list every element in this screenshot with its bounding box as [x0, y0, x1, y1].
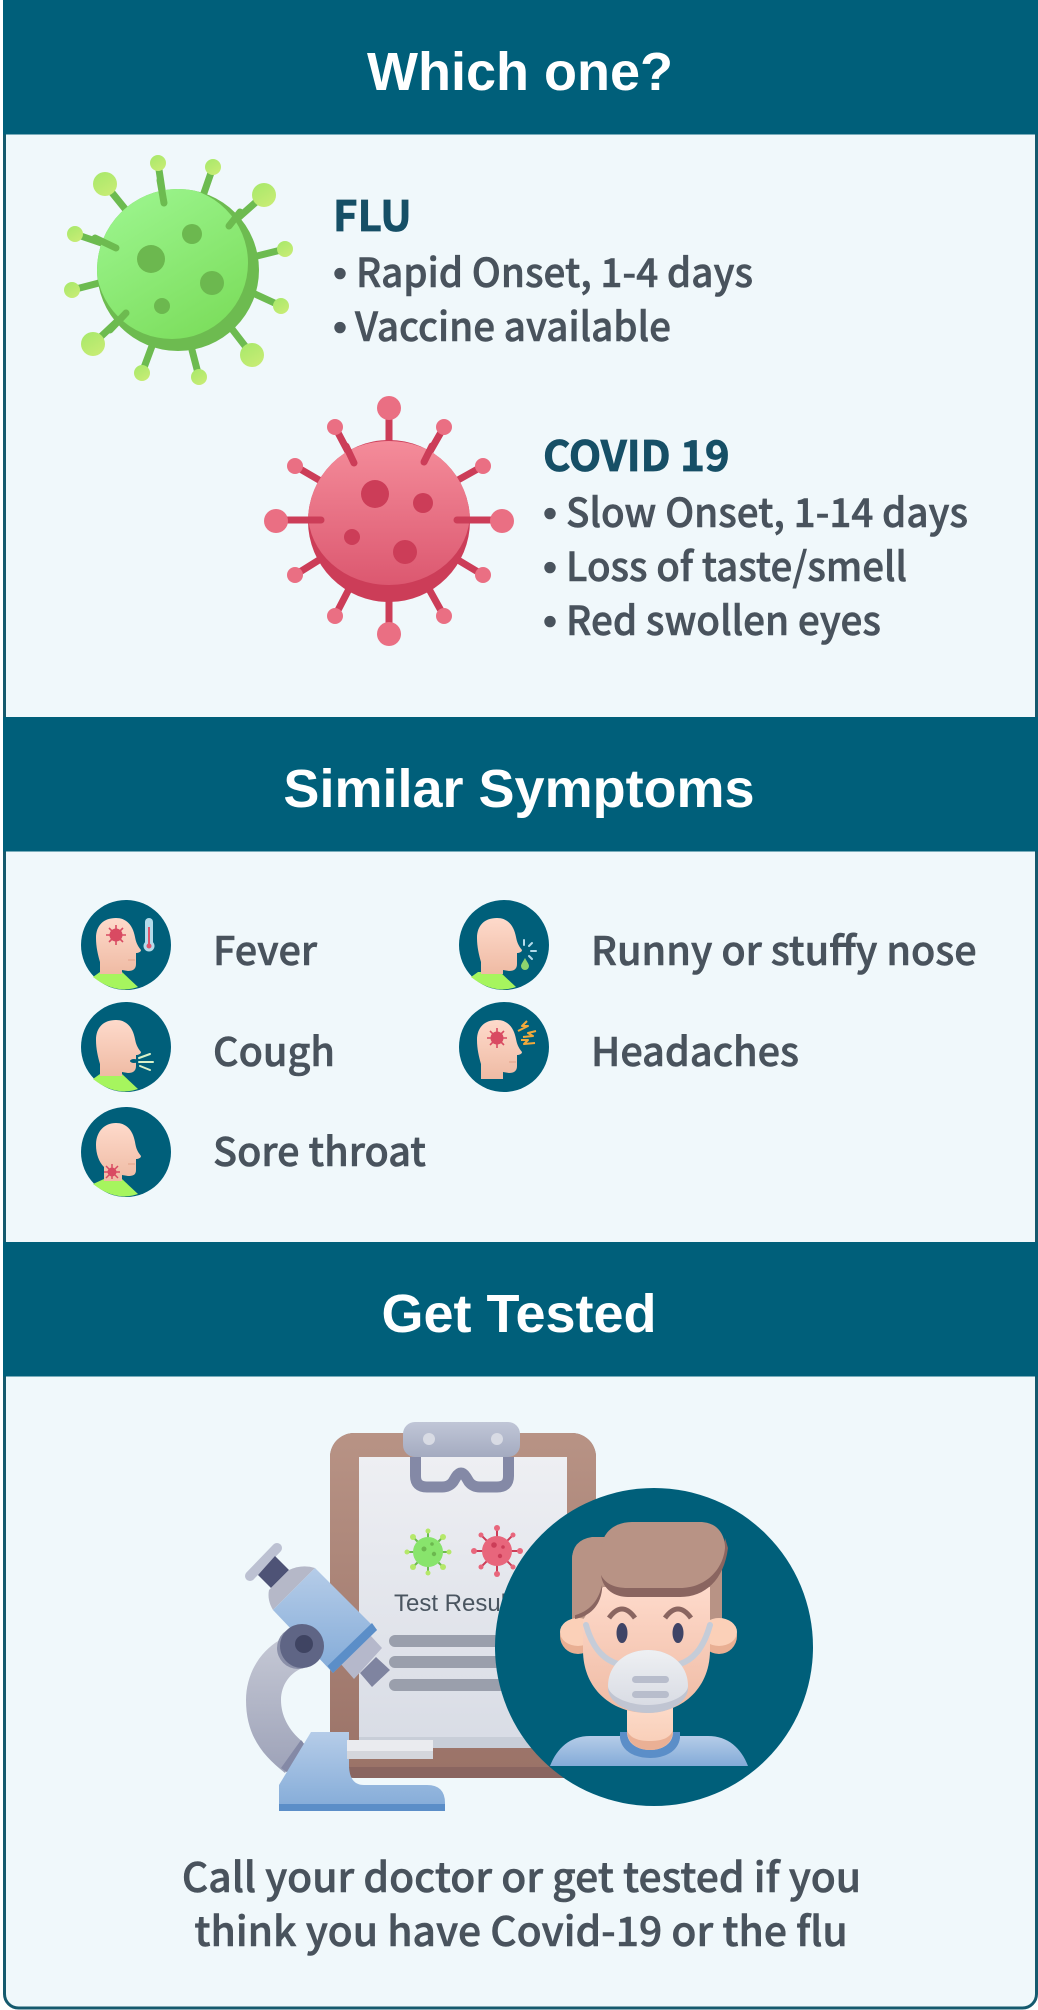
text: covid details — [543, 423, 968, 647]
header: Which one? — [3, 0, 1038, 134]
header: Get Tested — [3, 1242, 1038, 1376]
icon: sore throat — [81, 1107, 171, 1197]
label: Cough: Cough — [213, 1021, 335, 1078]
clipboard text: Test Results — [394, 1590, 525, 1617]
text: covid details: • — [543, 492, 557, 536]
header: Which one?: Which one? — [367, 42, 673, 102]
text: call to action: Call your doctor or get tested if you — [182, 1845, 861, 1904]
text: covid details: COVID 19 — [543, 423, 730, 484]
illustration: clipboard — [330, 1422, 596, 1778]
text: flu details — [333, 183, 753, 353]
label: Headaches: Headaches — [591, 1021, 799, 1078]
text: covid details: Slow Onset, 1-14 days — [566, 481, 968, 539]
text: flu details: • — [333, 252, 347, 296]
text: flu details: FLU — [333, 183, 412, 244]
header: Similar Symptoms — [3, 717, 1038, 852]
icon: covid virus — [264, 396, 514, 646]
text: covid details: Loss of taste/smell — [566, 535, 907, 593]
illustration: microscope — [246, 1548, 445, 1811]
label: Runny or stuffy nose: Runny or stuffy nose — [591, 920, 977, 977]
text: covid details: Red swollen eyes — [566, 589, 881, 647]
text: covid details: • — [543, 546, 557, 590]
mini green virus — [404, 1528, 452, 1576]
icon: cough — [81, 1002, 171, 1092]
header: Similar Symptoms: Similar Symptoms — [283, 759, 755, 819]
icon: flu virus — [64, 155, 293, 385]
label: Sore throat: Sore throat — [213, 1121, 426, 1178]
icon: fever — [81, 900, 171, 990]
text: call to action — [182, 1845, 861, 1958]
illustration: person wearing mask — [495, 1488, 813, 1806]
icon: runny nose — [459, 900, 549, 990]
text: call to action: think you have Covid-19 or the flu — [194, 1899, 848, 1958]
text: flu details: Vaccine available — [354, 295, 671, 353]
mini red virus — [471, 1525, 523, 1577]
header: Get Tested: Get Tested — [381, 1284, 657, 1344]
text: flu details: Rapid Onset, 1-4 days — [356, 241, 753, 299]
label: Fever: Fever — [213, 920, 318, 977]
text: covid details: • — [543, 600, 557, 644]
text: flu details: • — [333, 306, 347, 350]
icon: headaches — [459, 1002, 549, 1092]
